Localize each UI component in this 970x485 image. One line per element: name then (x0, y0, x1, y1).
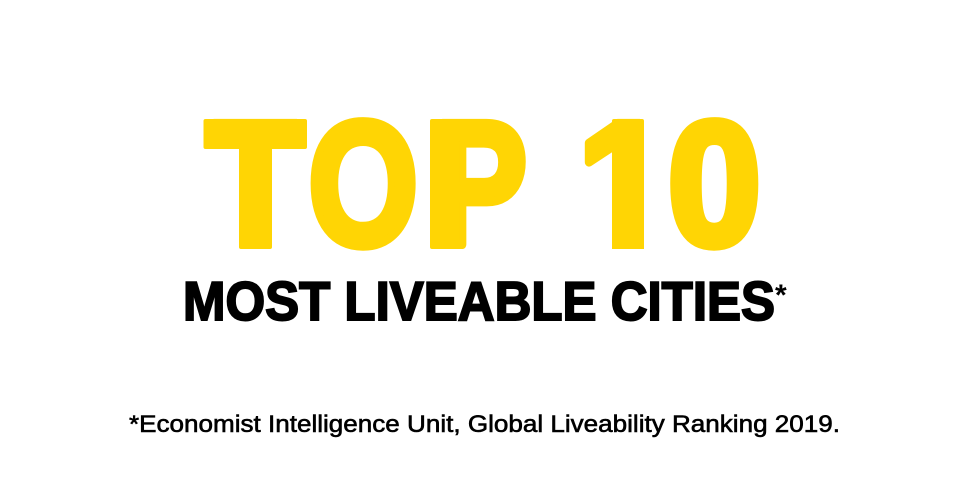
title: TOP 10: 10 (578, 87, 761, 282)
title: TOP 10: TOP (212, 85, 527, 282)
footnote: source: *Economist Intelligence Unit, Global Liveability Ranking 2019. (129, 411, 840, 438)
subtitle: most liveable cities: MOST LIVEABLE CITIES (183, 270, 775, 332)
title: TOP 10 (204, 85, 761, 282)
subtitle: most liveable cities: * (775, 279, 787, 312)
